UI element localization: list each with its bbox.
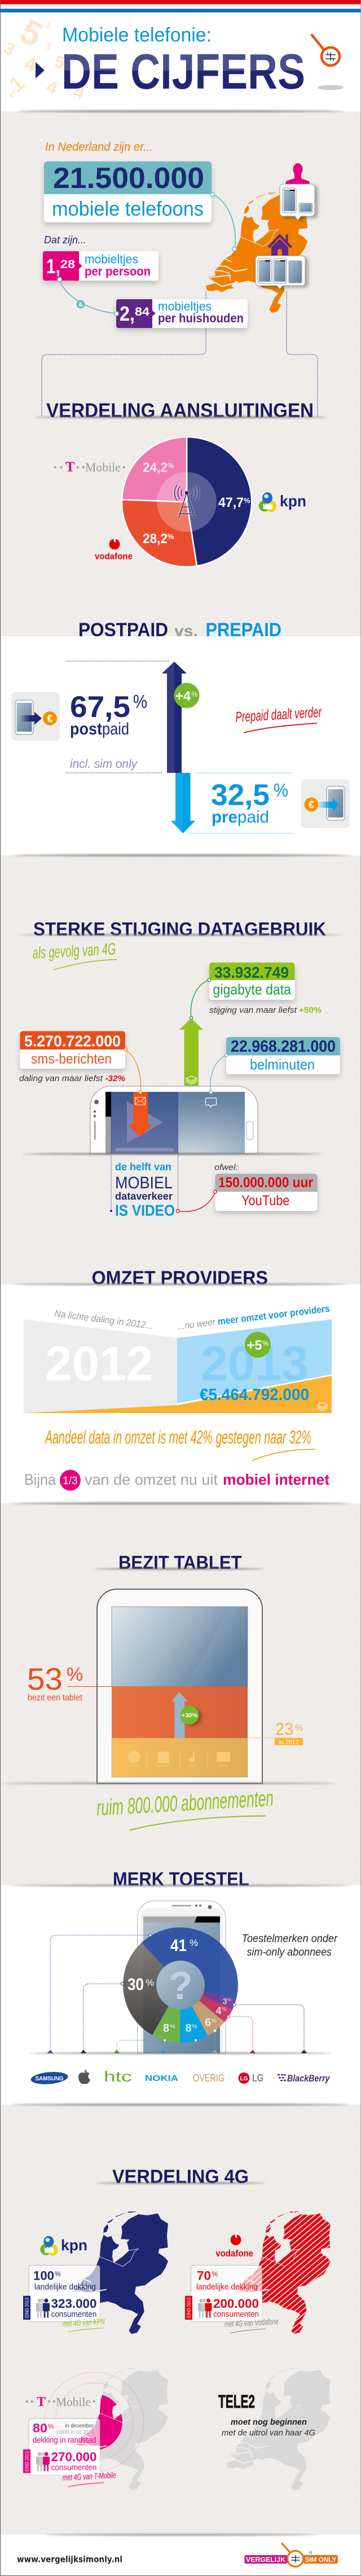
logo: HTC: htc bbox=[104, 2068, 132, 2085]
caption bbox=[242, 1933, 338, 1958]
prepaid stat bbox=[211, 779, 288, 826]
website url: www.vergelijksimonly.nl bbox=[17, 2555, 122, 2565]
prepaid stat: pre bbox=[212, 808, 237, 826]
heading: BEZIT TABLET bbox=[118, 1552, 242, 1573]
stat 53%: 53 bbox=[27, 1661, 63, 1696]
decorative numbers: 2 bbox=[8, 88, 17, 100]
pie labels: % bbox=[170, 2023, 175, 2030]
pie labels: % bbox=[244, 496, 250, 505]
heading: STERKE STIJGING DATAGEBRUIK bbox=[33, 919, 326, 939]
connectors bbox=[124, 978, 228, 1094]
panel: white band bbox=[0, 1284, 361, 1503]
handwritten T-Mobile bbox=[62, 2470, 116, 2487]
dotted video guides bbox=[110, 1092, 178, 1212]
card: sms: sms-berichten bbox=[31, 1051, 112, 1067]
badge +5% bbox=[245, 1332, 271, 1358]
pie labels: % bbox=[168, 461, 174, 470]
card: per person: 28 bbox=[60, 258, 75, 271]
logo: LG: LG bbox=[252, 2072, 263, 2084]
pie labels bbox=[143, 460, 250, 546]
icon: phone to euro: € bbox=[47, 713, 53, 724]
heading bbox=[78, 619, 281, 641]
pie labels: 8 bbox=[185, 2022, 192, 2035]
faint app icons: Email bbox=[219, 1764, 227, 1768]
text: sms change: daling van maar liefst bbox=[19, 1074, 103, 1083]
postpaid stat bbox=[70, 690, 147, 738]
pie chart: brands bbox=[123, 1927, 238, 2043]
info card: consumenten bbox=[51, 2464, 96, 2473]
pie labels: % bbox=[192, 2023, 197, 2030]
badge +5%: % bbox=[262, 1339, 269, 1348]
stat 23% bbox=[248, 1719, 303, 1746]
info card: dekking in randstad bbox=[33, 2436, 96, 2445]
text: half is video: IS VIDEO bbox=[115, 1201, 175, 1219]
logo: KPN: kpn bbox=[280, 492, 306, 510]
decorative numbers: 3 bbox=[44, 20, 52, 31]
stat 23%: % bbox=[295, 1722, 303, 1733]
logo: LG bbox=[238, 2072, 263, 2084]
bubble: household phones bbox=[256, 256, 305, 289]
info card: EIND 2013 bbox=[186, 2298, 192, 2318]
revenue value: €5.464.792.000 bbox=[200, 1386, 309, 1404]
icon: euro to phone bbox=[301, 779, 350, 828]
logo: Vergelijk Sim Only: VERGELIJK bbox=[246, 2556, 285, 2564]
card: sms bbox=[20, 1031, 125, 1069]
info card: consumenten bbox=[51, 2310, 96, 2319]
map: Netherlands bbox=[206, 178, 307, 313]
area chart: 2012 bbox=[45, 1337, 153, 1391]
connector with ampersand bbox=[58, 277, 118, 316]
decorative numbers: 3 bbox=[1, 38, 17, 59]
icon: phone to euro bbox=[11, 692, 60, 741]
phone landscape bbox=[90, 1086, 258, 1154]
info card: landelijke dekking bbox=[196, 2282, 258, 2292]
logo: T-Mobile: Mobile bbox=[85, 460, 121, 474]
pie chart: operators bbox=[122, 437, 252, 567]
badge +4%: % bbox=[191, 690, 198, 698]
text: data change: stijging van maar liefst bbox=[209, 1005, 297, 1015]
sentence one third: van de omzet nu uit bbox=[85, 1471, 218, 1488]
panel: Vodafone bbox=[185, 2211, 331, 2334]
caption 2013: ...nu weer bbox=[177, 1317, 217, 1332]
heading: VERDELING 4G bbox=[112, 2166, 249, 2188]
dotted guides bbox=[65, 661, 292, 833]
area chart bbox=[24, 1319, 332, 1413]
caption 2013: meer omzet voor providers bbox=[217, 1303, 331, 1327]
caption 2013 bbox=[177, 1303, 331, 1332]
section: 4G coverage bbox=[23, 2166, 331, 2490]
tablet device bbox=[97, 1589, 262, 1783]
postpaid stat: post bbox=[70, 720, 102, 738]
note sim only: incl. sim only bbox=[70, 758, 138, 771]
bubble: person phones bbox=[280, 184, 315, 220]
map: Tele2 bbox=[227, 2368, 331, 2490]
decorative numbers: 4 bbox=[71, 81, 87, 104]
logo: Samsung bbox=[30, 2071, 68, 2085]
pie labels: % bbox=[146, 1977, 154, 1988]
badge +4%: +4 bbox=[175, 689, 191, 704]
logo: KPN: kpn bbox=[61, 2237, 87, 2254]
pie labels: 6 bbox=[205, 2017, 211, 2029]
badge +30% bbox=[180, 1706, 199, 1724]
logo: Samsung: SAMSUNG bbox=[35, 2076, 64, 2082]
logo: T-Mobile: T bbox=[37, 2395, 46, 2409]
pie labels bbox=[127, 1936, 231, 2035]
decorative numbers: 5 bbox=[52, 53, 67, 73]
pie labels: % bbox=[227, 1997, 231, 2002]
icon: speech bubble bbox=[205, 1098, 217, 1107]
section: revenue bbox=[0, 1267, 361, 1505]
info card: 70 bbox=[197, 2268, 211, 2282]
heading: MERK TOESTEL bbox=[113, 1869, 249, 1890]
stat 53%: bezit een tablet bbox=[28, 1693, 82, 1703]
leader dots and markers bbox=[47, 1934, 307, 2053]
connector YouTube bbox=[177, 1190, 217, 1213]
prepaid stat: 32,5 bbox=[211, 779, 270, 812]
label: other: OVERIG bbox=[193, 2072, 224, 2084]
coverage rings bbox=[45, 2372, 144, 2472]
icon: euro to phone: € bbox=[309, 799, 314, 811]
section: number of phones bbox=[42, 141, 318, 417]
dotted leaders bbox=[50, 1935, 304, 2050]
card: per household bbox=[116, 299, 248, 328]
pie labels: 41 bbox=[170, 1936, 187, 1955]
info card: (100% in Q2-2015) bbox=[56, 2430, 95, 2435]
pie labels: 8 bbox=[163, 2022, 169, 2035]
decorative numbers bbox=[1, 11, 87, 104]
info card bbox=[23, 2418, 100, 2475]
logo: KPN bbox=[40, 2236, 87, 2256]
shadow under phone bbox=[23, 1153, 323, 1155]
logo: T-Mobile: T bbox=[65, 460, 75, 475]
section: device brands bbox=[0, 1869, 361, 2106]
heading: VERDELING AANSLUITINGEN bbox=[46, 400, 314, 422]
card: YouTube: YouTube bbox=[241, 1193, 290, 1209]
info card: 323.000 bbox=[51, 2297, 96, 2311]
panel: T-Mobile bbox=[23, 2368, 168, 2490]
panel: KPN bbox=[23, 2211, 168, 2334]
info card: EIND 2013 bbox=[24, 2451, 29, 2472]
info card: 100 bbox=[33, 2268, 54, 2282]
card: per household: 84 bbox=[135, 305, 149, 318]
shadow under header bbox=[17, 110, 344, 112]
logo: T-Mobile bbox=[54, 460, 125, 475]
panel: white band bbox=[0, 1886, 361, 2105]
label phones: mobiele telefoons bbox=[52, 197, 204, 220]
logo: T-Mobile bbox=[26, 2395, 95, 2409]
Tele2 text: moet nog beginnen bbox=[231, 2417, 307, 2427]
logo: Nokia: NOKIA bbox=[145, 2074, 178, 2083]
pie labels: 3 bbox=[222, 1997, 227, 2006]
icon: person bbox=[285, 163, 310, 186]
handwritten data share bbox=[45, 1427, 315, 1460]
growth arrow bbox=[171, 1692, 188, 1738]
handwritten Vodafone: met 4G van Vodafone bbox=[224, 2317, 279, 2329]
stat 53% bbox=[27, 1661, 112, 1703]
handwritten T-Mobile: met 4G van T-Mobile bbox=[62, 2470, 116, 2483]
text: half is video: dataverkeer bbox=[115, 1191, 173, 1202]
postpaid stat: 67,5 bbox=[70, 690, 130, 724]
map: T-Mobile bbox=[64, 2368, 168, 2490]
arrow marker bbox=[36, 62, 45, 78]
card: per household: 2, bbox=[120, 302, 135, 325]
card: YouTube: 150.000.000 uur bbox=[218, 1175, 313, 1191]
prepaid stat: % bbox=[274, 780, 288, 801]
sentence one third: 1/3 bbox=[63, 1475, 78, 1487]
badge +4% bbox=[174, 683, 200, 708]
badge +30%: +30% bbox=[182, 1712, 197, 1719]
faint app icons: Applications bbox=[155, 1764, 172, 1768]
title line: Mobiele telefonie: bbox=[62, 24, 212, 46]
stat 23%: 23 bbox=[275, 1719, 293, 1739]
info card: 80 bbox=[33, 2421, 47, 2435]
badge +5%: +5 bbox=[247, 1338, 262, 1353]
sentence one third bbox=[24, 1470, 329, 1490]
section: tablet bbox=[2, 1552, 336, 1830]
handwritten subscribers bbox=[96, 1786, 274, 1830]
logo: T-Mobile: Mobile bbox=[56, 2395, 91, 2409]
heading: OMZET PROVIDERS bbox=[91, 1267, 268, 1289]
pie labels: % bbox=[211, 2018, 217, 2024]
handwritten subtitle: als gevolg van 4G bbox=[32, 940, 116, 963]
area chart: 2013 bbox=[201, 1337, 309, 1391]
logo: Tele2: TELE2 bbox=[218, 2391, 255, 2412]
pie labels: 24,2 bbox=[143, 460, 168, 475]
stat 53%: % bbox=[67, 1664, 83, 1685]
text: half is video: MOBIEL bbox=[115, 1174, 173, 1192]
caption 2012: Na lichte daling in 2012... bbox=[54, 1308, 153, 1331]
arrow: sms down bbox=[128, 1092, 152, 1137]
text: sms change: -32% bbox=[105, 1074, 125, 1083]
arrow up bbox=[162, 662, 187, 773]
decorative numbers: 4 bbox=[23, 53, 38, 76]
icon: house bbox=[267, 233, 293, 257]
total phones card bbox=[44, 161, 212, 222]
info card: % bbox=[48, 2422, 54, 2430]
pie chart: brands: ? bbox=[169, 1963, 192, 2008]
section: header bbox=[0, 0, 361, 112]
logo: Vodafone bbox=[215, 2231, 253, 2259]
heading: POSTPAID bbox=[78, 619, 168, 641]
pie labels: % bbox=[221, 2006, 227, 2013]
section: postpaid vs prepaid bbox=[0, 619, 361, 856]
coverage area bbox=[77, 2395, 122, 2450]
logo: KPN bbox=[259, 492, 306, 512]
info card: EIND 2013 bbox=[24, 2298, 29, 2318]
card: call minutes: 22.968.281.000 bbox=[231, 1038, 336, 1056]
phone device bbox=[138, 1901, 226, 2053]
prepaid stat: paid bbox=[237, 808, 269, 826]
intro text: In Nederland zijn er... bbox=[45, 141, 153, 154]
big number: 21.500.000 bbox=[53, 162, 204, 195]
heading: PREPAID bbox=[205, 619, 281, 641]
text ofwel: ofwel: bbox=[214, 1162, 238, 1172]
faint app icons bbox=[127, 1750, 230, 1768]
logo: Vodafone bbox=[95, 535, 133, 562]
card: sms: 5.270.722.000 bbox=[24, 1032, 121, 1049]
panel: white band bbox=[0, 636, 361, 855]
decorative numbers: 1 bbox=[45, 40, 54, 52]
arrow down bbox=[171, 773, 195, 833]
section: footer bbox=[0, 2534, 361, 2576]
info card bbox=[185, 2266, 262, 2321]
Tele2 text: met de uitrol van haar 4G bbox=[222, 2429, 315, 2438]
handwritten Vodafone bbox=[224, 2317, 279, 2333]
map: KPN bbox=[64, 2211, 168, 2334]
connector with ampersand: & bbox=[78, 301, 83, 308]
postpaid stat: % bbox=[133, 691, 147, 712]
dotted connectors bbox=[42, 291, 318, 417]
Tele2 text bbox=[222, 2417, 315, 2438]
logo: Vodafone: vodafone bbox=[95, 552, 133, 562]
sentence one third: mobiel internet bbox=[223, 1471, 329, 1488]
section: data usage bbox=[18, 919, 343, 1219]
info card: % bbox=[212, 2270, 218, 2278]
logo: LG: LG bbox=[240, 2076, 248, 2082]
logo row bbox=[30, 2068, 331, 2085]
handwritten KPN bbox=[62, 2317, 105, 2332]
flag stripes bbox=[0, 0, 361, 12]
decorative numbers: 1 bbox=[5, 71, 29, 97]
info card: 200.000 bbox=[213, 2297, 259, 2311]
heading: vs. bbox=[174, 622, 198, 640]
logo: Vergelijk Sim Only: SIM ONLY bbox=[305, 2556, 336, 2564]
logo: Vodafone: vodafone bbox=[215, 2248, 253, 2259]
card: call minutes bbox=[226, 1037, 340, 1074]
pie labels: 4 bbox=[215, 2005, 222, 2017]
card: data: gigabyte data bbox=[213, 981, 291, 998]
faint app icons: Browser bbox=[128, 1764, 140, 1768]
card: per person: 1, bbox=[46, 255, 60, 278]
caption: Toestelmerken onder bbox=[242, 1933, 338, 1945]
card: per person bbox=[43, 251, 159, 281]
info card: landelijke dekking bbox=[34, 2282, 96, 2292]
text: half is video: de helft van bbox=[115, 1161, 171, 1173]
text: half is video bbox=[115, 1161, 175, 1219]
text Dat zijn: Dat zijn... bbox=[44, 234, 86, 246]
logo: Vergelijk Sim Only bbox=[245, 2544, 338, 2566]
pie labels: % bbox=[168, 532, 174, 541]
icon: magnifying glass bbox=[312, 35, 344, 90]
main title: DE CIJFERS bbox=[61, 43, 305, 99]
caption: sim-only abonnees bbox=[247, 1947, 332, 1958]
section: distribution of connections bbox=[33, 400, 328, 567]
logo: Vergelijk Sim Only: ® bbox=[309, 2551, 312, 2555]
arrow: data up bbox=[179, 1018, 203, 1087]
pie labels: % bbox=[190, 1938, 198, 1948]
panel: Tele2 bbox=[218, 2368, 331, 2490]
connector to map bbox=[210, 193, 236, 251]
map: Vodafone bbox=[227, 2211, 331, 2334]
postpaid stat: paid bbox=[102, 720, 129, 738]
info card: in december bbox=[65, 2423, 94, 2429]
card: YouTube bbox=[215, 1174, 317, 1211]
card: per person: per persoon bbox=[85, 264, 151, 278]
pie labels: 28,2 bbox=[143, 531, 168, 546]
card: per person: mobieltjes bbox=[85, 252, 138, 266]
sentence one third: Bijna bbox=[24, 1471, 56, 1488]
info card: 270.000 bbox=[51, 2450, 96, 2464]
handwritten note bbox=[235, 703, 323, 733]
handwritten subtitle bbox=[32, 940, 117, 970]
pie labels: 47,7 bbox=[218, 495, 244, 510]
card: per household: mobieltjes bbox=[158, 299, 212, 313]
faint app icons: Music bbox=[190, 1764, 197, 1768]
decorative numbers: 5 bbox=[13, 11, 49, 55]
info card bbox=[23, 2266, 100, 2321]
info card: % bbox=[55, 2270, 61, 2278]
card: data bbox=[209, 963, 294, 1000]
pie labels: 30 bbox=[127, 1975, 144, 1994]
logo: Apple bbox=[78, 2070, 90, 2084]
card: call minutes: belminuten bbox=[250, 1056, 315, 1073]
handwritten KPN: met 4G van KPN bbox=[62, 2317, 105, 2329]
info card: consumenten bbox=[213, 2310, 259, 2319]
icon: antenna bbox=[174, 485, 199, 518]
logo: BlackBerry: BlackBerry bbox=[287, 2073, 331, 2084]
decorative numbers: 4 bbox=[44, 76, 60, 99]
card: per household: per huishouden bbox=[158, 311, 244, 325]
stat 23%: in 2012 bbox=[279, 1739, 299, 1746]
text: data change: +50% bbox=[299, 1005, 322, 1015]
card: data: 33.932.749 bbox=[214, 964, 289, 981]
